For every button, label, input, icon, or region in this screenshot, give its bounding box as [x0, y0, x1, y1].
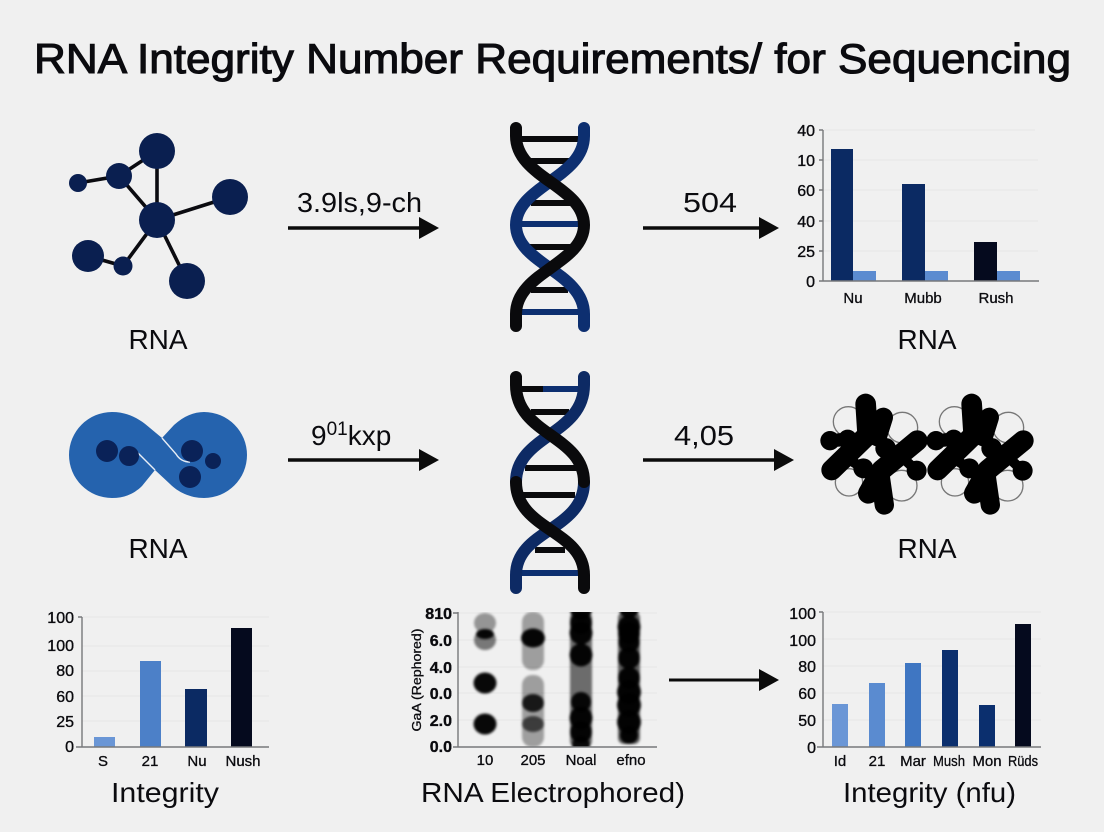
bar chart: bottom right: 0: [807, 740, 816, 757]
bar chart: top right: 25: [797, 244, 815, 261]
bar chart: bottom right: 100: [789, 606, 816, 623]
title: RNA Integrity Number Requirements/ for Sequencing: [34, 35, 1071, 82]
label: Integrity (nfu): Integrity (nfu): [843, 777, 1016, 808]
bar chart: top right: Nu: [843, 290, 863, 307]
chart: RNA electrophoresis gel: 10: [477, 752, 493, 769]
arrow: bottom row: [669, 669, 779, 691]
bar chart: bottom left: 80: [56, 663, 74, 680]
bar chart: bottom right: Mon: [972, 753, 1002, 770]
label: RNA chart: RNA: [897, 324, 957, 355]
arrow label: first row right: 504: [683, 187, 737, 218]
bar chart: bottom left: 60: [56, 689, 74, 706]
icon: RNA molecule network: [69, 133, 248, 299]
label: RNA cluster: RNA: [897, 533, 957, 564]
chart: RNA electrophoresis gel: 2.0: [430, 713, 452, 730]
bar chart: bottom left: 0: [65, 739, 74, 756]
arrow: second row left: [288, 449, 439, 471]
chart: RNA electrophoresis gel: GaA (Rephored): [409, 628, 424, 732]
bar chart: bottom right: [789, 606, 1041, 770]
bar chart: bottom left: S: [98, 753, 108, 770]
label: RNA infinity: RNA: [128, 533, 188, 564]
chart: RNA electrophoresis gel: 4.0: [430, 660, 452, 677]
bar chart: bottom right: Mush: [933, 753, 965, 770]
label: Integrity: Integrity: [111, 777, 219, 808]
bar chart: bottom right: 60: [798, 686, 816, 703]
bar chart: top right: 10: [797, 153, 815, 170]
icon: DNA helix top: [516, 128, 584, 326]
bar chart: top right: Rush: [978, 290, 1014, 307]
bar chart: bottom right: 80: [798, 659, 816, 676]
chart: RNA electrophoresis gel: Noal: [566, 752, 596, 769]
bar chart: bottom left: [47, 610, 269, 770]
bar chart: bottom right: 21: [869, 753, 885, 770]
chart: RNA electrophoresis gel: 810: [425, 606, 452, 623]
arrow label: second row left: 9: [311, 420, 327, 451]
bar chart: bottom left: 25: [56, 714, 74, 731]
chart: RNA electrophoresis gel: 6.0: [430, 633, 452, 650]
bar chart: bottom left: Nu: [187, 753, 207, 770]
bar chart: top right: 40: [797, 123, 815, 140]
icon: black and white RNA cluster: [820, 404, 1033, 505]
gel bands: [472, 612, 643, 746]
bar chart: bottom right: Mar: [900, 753, 926, 770]
arrow: first row right: [643, 217, 779, 239]
bar chart: bottom right: Rüds: [1008, 753, 1038, 770]
chart: RNA electrophoresis gel: 0.0: [430, 686, 452, 703]
arrow label: first row left: 3.9ls,9-ch: [297, 187, 422, 218]
chart: RNA electrophoresis gel: [409, 598, 657, 769]
bar chart: bottom left: Nush: [225, 753, 261, 770]
icon: blue infinity RNA: [69, 412, 247, 498]
bar chart: bottom left: 100: [47, 610, 74, 627]
arrow label: second row left: kxp: [348, 420, 391, 451]
label: RNA molecule: RNA: [128, 324, 188, 355]
arrow label: second row left: 01: [327, 419, 348, 440]
bar chart: bottom left: 100: [47, 638, 74, 655]
bar chart: top right: 60: [797, 183, 815, 200]
bar chart: bottom right: Id: [834, 753, 846, 770]
label: RNA Electrophored: RNA Electrophored): [421, 777, 685, 808]
bar chart: top right: Mubb: [904, 290, 942, 307]
bar chart: bottom right: 100: [789, 633, 816, 650]
arrow label: second row right: 4,05: [674, 420, 734, 451]
chart: RNA electrophoresis gel: 205: [520, 752, 546, 769]
chart: RNA electrophoresis gel: 0.0: [430, 739, 452, 756]
icon: DNA helix middle: [516, 377, 584, 588]
arrow: first row left: [288, 217, 439, 239]
bar chart: top right: [797, 123, 1039, 307]
bar chart: top right: 40: [797, 214, 815, 231]
bar chart: bottom left: 21: [142, 753, 158, 770]
bar chart: bottom right: 50: [798, 713, 816, 730]
bar chart: top right: 0: [806, 274, 815, 291]
arrow: second row right: [643, 449, 794, 471]
chart: RNA electrophoresis gel: efno: [616, 752, 646, 769]
